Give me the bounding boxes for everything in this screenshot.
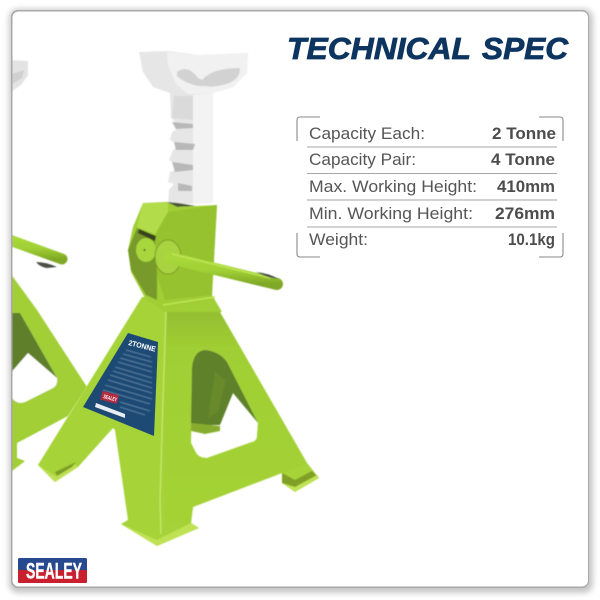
left jack window bbox=[8, 313, 57, 403]
feet bbox=[38, 462, 319, 546]
left jack handle shadow bbox=[36, 262, 57, 268]
row: min working height: Min. Working Height: bbox=[309, 205, 473, 223]
collar lower highlight bbox=[163, 297, 215, 305]
main jack stand bbox=[38, 51, 319, 546]
handle bbox=[170, 258, 277, 284]
collar side slot bbox=[128, 228, 157, 300]
collar top bbox=[137, 203, 168, 234]
row: weight: 10.1kg bbox=[508, 231, 555, 249]
row: min working height: 276mm bbox=[495, 205, 555, 223]
left jack handle bbox=[4, 238, 62, 259]
row: capacity pair: Capacity Pair: bbox=[309, 151, 416, 169]
window inner shadow bbox=[191, 350, 258, 425]
far foot in window bbox=[191, 423, 220, 434]
dark gap under stem bbox=[167, 202, 196, 207]
label panel bbox=[83, 333, 158, 436]
left jack saddle bbox=[12, 60, 28, 91]
spec table bbox=[297, 117, 563, 257]
window inner highlight bbox=[208, 372, 226, 418]
label fine print bbox=[103, 350, 152, 415]
row: weight bbox=[309, 231, 555, 249]
row: capacity each: 2 Tonne bbox=[492, 125, 556, 143]
left partial jack stand bbox=[12, 60, 87, 472]
collar front face bbox=[155, 205, 217, 300]
sealey logo bbox=[18, 558, 87, 584]
product label bbox=[83, 333, 158, 436]
row: min working height bbox=[309, 205, 555, 223]
sealey logo: SEALEY bbox=[26, 558, 82, 584]
title bbox=[287, 31, 569, 66]
slot dark opening bbox=[138, 229, 156, 241]
left jack inner shadow bbox=[8, 313, 57, 378]
leg edge highlight bbox=[160, 312, 166, 534]
washer bbox=[155, 240, 181, 274]
pin dot bbox=[144, 249, 146, 251]
handle highlight bbox=[172, 254, 270, 278]
row dividers bbox=[307, 147, 557, 227]
pivot pin bbox=[136, 238, 156, 262]
front face shade bbox=[163, 297, 307, 536]
row: capacity pair: 4 Tonne bbox=[491, 151, 555, 169]
left jack body bbox=[8, 270, 87, 474]
saddle and ratchet stem bbox=[139, 51, 248, 205]
label heading: 2TONNE bbox=[128, 338, 157, 354]
row: capacity pair bbox=[309, 151, 555, 169]
row: capacity each: Capacity Each: bbox=[309, 125, 425, 143]
row: weight: Weight: bbox=[309, 231, 368, 249]
table brackets bbox=[297, 117, 563, 257]
handle shadow mark bbox=[256, 272, 279, 279]
row: max working height: 410mm bbox=[497, 178, 555, 196]
label white strip bbox=[95, 403, 125, 418]
label mini logo: SEALEY bbox=[102, 394, 118, 404]
row: max working height: Max. Working Height: bbox=[309, 178, 477, 196]
head collar bbox=[128, 202, 222, 312]
title word one: TECHNICAL bbox=[287, 31, 471, 66]
row: capacity each bbox=[309, 125, 556, 143]
left jack saddle hollow bbox=[12, 70, 24, 84]
title word two: SPEC bbox=[482, 31, 569, 66]
base and legs bbox=[38, 297, 319, 546]
row: max working height bbox=[309, 178, 555, 196]
